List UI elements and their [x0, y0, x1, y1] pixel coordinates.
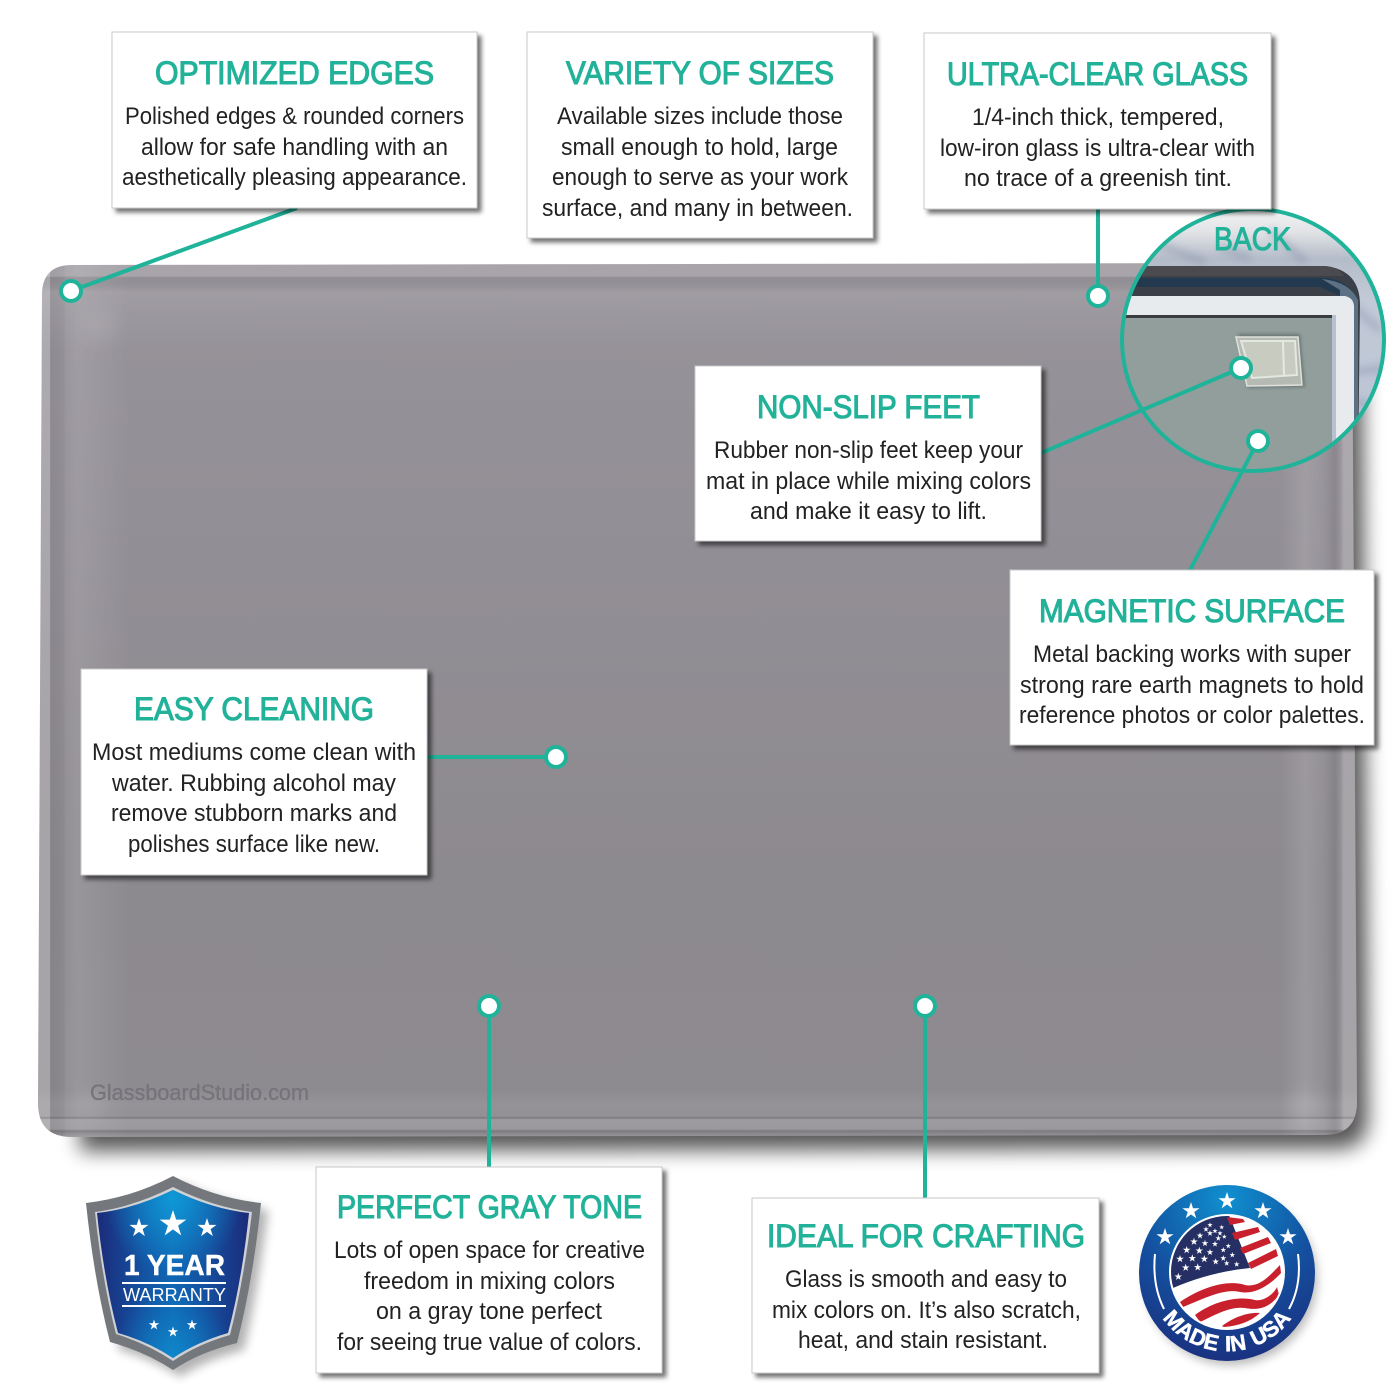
connector lines — [71, 208, 1258, 1198]
panel: non-slip feet: Rubber non-slip feet keep your — [714, 437, 1023, 464]
panel: easy cleaning — [81, 669, 427, 875]
panel: ideal for crafting: mix colors on. It’s also scratch, — [772, 1297, 1081, 1324]
panel: ultra-clear glass: no trace of a greenish tint. — [964, 165, 1232, 192]
panel: magnetic surface: Metal backing works with super — [1033, 641, 1351, 668]
panel: perfect gray tone: Lots of open space for creative — [334, 1237, 645, 1264]
panel: non-slip feet: mat in place while mixing colors — [706, 468, 1031, 495]
glass board — [30, 255, 1370, 1151]
panel: perfect gray tone: for seeing true value of colors. — [337, 1329, 642, 1356]
panel: easy cleaning: polishes surface like new. — [128, 831, 380, 858]
panel: perfect gray tone: freedom in mixing colors — [364, 1268, 615, 1295]
rubber foot — [1236, 334, 1305, 388]
panel: ideal for crafting: IDEAL FOR CRAFTING — [767, 1218, 1085, 1254]
panel: variety of sizes: Available sizes include those — [557, 103, 843, 130]
panel: ultra-clear glass: low-iron glass is ultra-clear with — [940, 135, 1255, 162]
warranty shield badge: WARRANTY — [123, 1285, 226, 1305]
panel: non-slip feet: and make it easy to lift. — [750, 498, 987, 525]
watermark: GlassboardStudio.com — [90, 1080, 309, 1105]
warranty shield badge: 1 YEAR — [124, 1250, 225, 1282]
made in usa badge: MADE IN USA — [1162, 1309, 1292, 1352]
panel: magnetic surface: reference photos or color palettes. — [1019, 702, 1365, 729]
panel: variety of sizes — [527, 32, 873, 238]
panel: variety of sizes: small enough to hold, large — [561, 134, 838, 161]
panel: magnetic surface: MAGNETIC SURFACE — [1039, 593, 1345, 629]
panel: variety of sizes: enough to serve as your work — [552, 164, 849, 191]
panel: easy cleaning: remove stubborn marks and — [111, 800, 397, 827]
panel: ultra-clear glass: 1/4-inch thick, tempered, — [972, 104, 1224, 131]
panel: ideal for crafting: Glass is smooth and easy to — [785, 1266, 1067, 1293]
callout dots — [61, 281, 1268, 1016]
panel: easy cleaning: Most mediums come clean with — [92, 739, 416, 766]
panel: optimized edges — [112, 32, 477, 208]
panel: non-slip feet — [695, 366, 1041, 541]
panel: ideal for crafting: heat, and stain resistant. — [798, 1327, 1048, 1354]
panel: magnetic surface: strong rare earth magnets to hold — [1020, 672, 1364, 699]
panel: easy cleaning: water. Rubbing alcohol may — [111, 770, 396, 797]
warranty shield badge — [86, 1176, 268, 1377]
panel: ultra-clear glass: ULTRA-CLEAR GLASS — [947, 56, 1248, 92]
back detail circle — [1120, 205, 1390, 485]
panel: perfect gray tone: PERFECT GRAY TONE — [337, 1189, 642, 1225]
panel: magnetic surface — [1010, 570, 1374, 745]
panel: ultra-clear glass — [924, 33, 1271, 209]
panel: easy cleaning: EASY CLEANING — [134, 691, 374, 727]
panel: variety of sizes: surface, and many in between. — [542, 195, 853, 222]
panel: variety of sizes: VARIETY OF SIZES — [566, 55, 834, 91]
made in usa badge — [1139, 1185, 1322, 1370]
panel: ideal for crafting — [752, 1198, 1099, 1373]
panel: optimized edges: OPTIMIZED EDGES — [155, 55, 434, 91]
panel: optimized edges: Polished edges & rounded corners — [125, 103, 464, 130]
panel: non-slip feet: NON-SLIP FEET — [757, 389, 980, 425]
panel: optimized edges: aesthetically pleasing appearance. — [122, 164, 467, 191]
panel: perfect gray tone — [316, 1167, 662, 1373]
panel: perfect gray tone: on a gray tone perfect — [376, 1298, 602, 1325]
flag — [1171, 1216, 1281, 1327]
back label: BACK — [1214, 221, 1291, 257]
panel: optimized edges: allow for safe handling with an — [141, 134, 448, 161]
